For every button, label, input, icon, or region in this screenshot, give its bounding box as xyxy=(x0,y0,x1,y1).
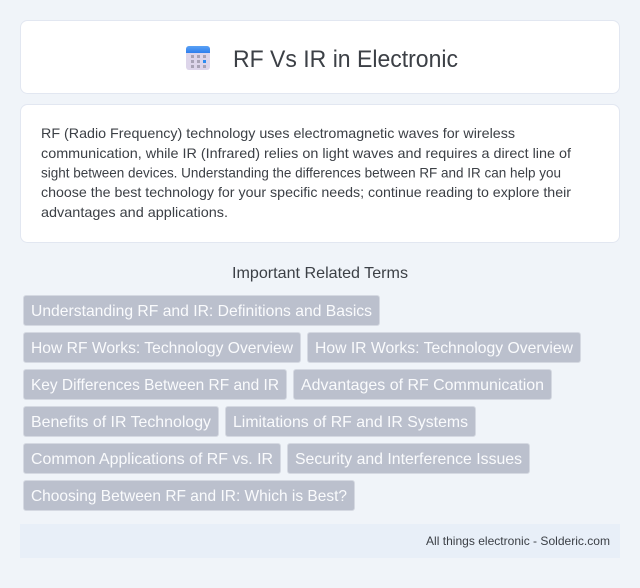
heading: related terms: Important Related Terms xyxy=(232,265,408,282)
text block: intro: sight between devices. Understanding the differences between RF and IR can help you xyxy=(41,165,561,181)
footer: All things electronic - Solderic.com xyxy=(426,534,610,548)
text block: intro xyxy=(41,125,571,220)
tag xyxy=(226,406,476,436)
header panel xyxy=(20,20,620,94)
tag xyxy=(308,332,580,362)
text block: intro: RF (Radio Frequency) technology uses electromagnetic waves for wireless xyxy=(41,125,515,141)
tag: Security and Interference Issues xyxy=(295,451,522,468)
icon: calendar xyxy=(186,46,210,70)
footer xyxy=(20,524,620,558)
text block: intro: advantages and applications. xyxy=(41,204,228,220)
tag list xyxy=(24,296,580,510)
tag: How IR Works: Technology Overview xyxy=(315,340,573,357)
tag xyxy=(294,370,552,400)
tag: Common Applications of RF vs. IR xyxy=(31,451,273,468)
tag: Limitations of RF and IR Systems xyxy=(233,414,468,431)
tag xyxy=(24,406,218,436)
tag: Advantages of RF Communication xyxy=(301,377,544,394)
title: RF Vs IR in Electronic xyxy=(233,46,458,73)
tag xyxy=(24,296,380,326)
text block: intro: communication, while IR (Infrared) relies on light waves and requires a direct line of xyxy=(41,145,571,161)
tag: Understanding RF and IR: Definitions and Basics xyxy=(31,303,372,320)
tag xyxy=(288,444,530,474)
tag xyxy=(24,480,354,510)
tag xyxy=(24,370,286,400)
panel: intro paragraph xyxy=(20,104,620,242)
tag: Choosing Between RF and IR: Which is Best? xyxy=(31,488,347,505)
tag xyxy=(24,444,280,474)
tag xyxy=(24,332,300,362)
tag: Benefits of IR Technology xyxy=(31,414,211,431)
text block: intro: choose the best technology for your specific needs; continue reading to explore their xyxy=(41,184,571,200)
tag: Key Differences Between RF and IR xyxy=(31,377,279,394)
tag: How RF Works: Technology Overview xyxy=(31,340,293,357)
